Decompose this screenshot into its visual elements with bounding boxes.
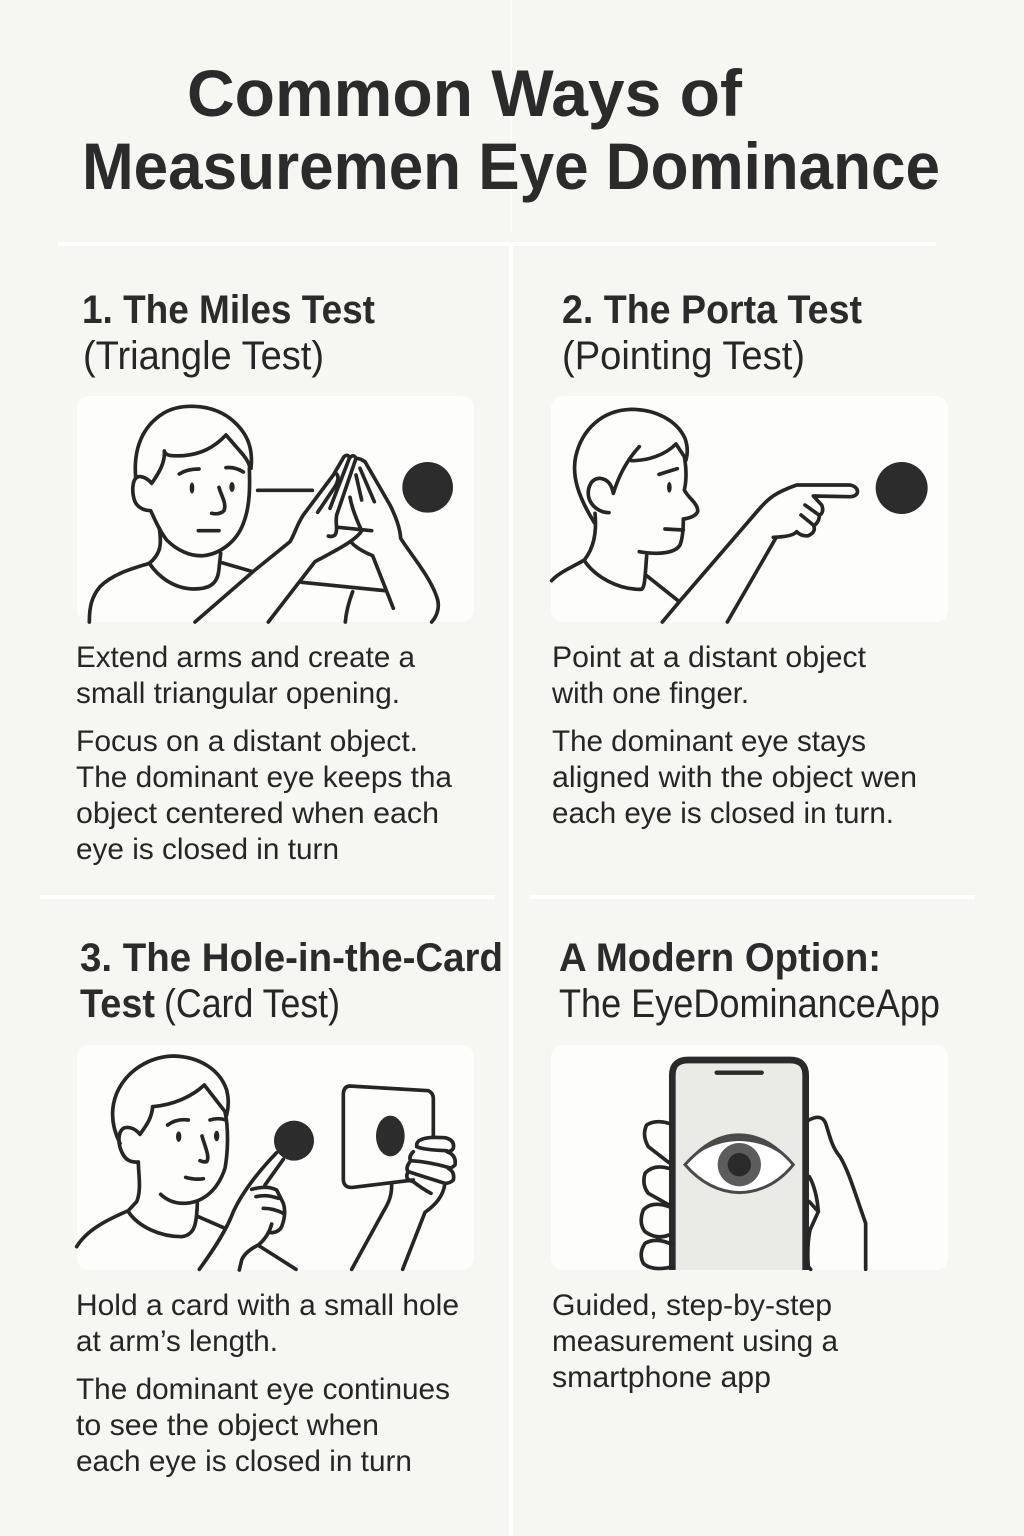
title: Measuremen Eye Dominance bbox=[82, 129, 940, 203]
text block: card test instructions bbox=[76, 1289, 459, 1478]
heading: a modern option bbox=[559, 936, 940, 1026]
panel: the miles test bbox=[76, 288, 474, 866]
heading: the hole-in-the-card test: (Card Test) bbox=[164, 982, 340, 1026]
heading: the miles test bbox=[82, 288, 375, 378]
illustration card: person pointing at a dot bbox=[551, 396, 948, 622]
text block: miles test instructions: small triangular opening. bbox=[76, 677, 400, 710]
heading: the porta test: 2. The Porta Test bbox=[562, 288, 862, 332]
text block: porta test instructions: aligned with the object wen bbox=[552, 761, 917, 794]
illustration card: smartphone with eye held in hand bbox=[551, 1045, 948, 1270]
heading: the porta test: (Pointing Test) bbox=[562, 334, 805, 378]
heading: the hole-in-the-card test: 3. The Hole-in-the-Card bbox=[80, 936, 503, 980]
heading: the hole-in-the-card test: Test bbox=[80, 982, 155, 1026]
text block: card test instructions: Hold a card with a small hole bbox=[76, 1289, 459, 1322]
illustration card: person forming a triangle with hands bbox=[77, 396, 474, 622]
heading: a modern option: A Modern Option: bbox=[559, 936, 881, 980]
text block: app description: Guided, step-by-step bbox=[552, 1289, 832, 1322]
text block: porta test instructions: Point at a distant object bbox=[552, 641, 867, 674]
text block: app description: smartphone app bbox=[552, 1361, 771, 1394]
text block: porta test instructions: The dominant eye stays bbox=[552, 725, 866, 758]
text block: card test instructions: each eye is closed in turn bbox=[76, 1445, 412, 1478]
text block: app description: measurement using a bbox=[552, 1325, 838, 1358]
panel: a modern option bbox=[551, 936, 948, 1394]
heading: the miles test: (Triangle Test) bbox=[83, 334, 324, 378]
text block: miles test instructions: eye is closed in turn bbox=[76, 833, 339, 866]
text block: porta test instructions: with one finger. bbox=[551, 677, 749, 710]
heading: a modern option: The EyeDominanceApp bbox=[559, 982, 940, 1026]
text block: card test instructions: at arm’s length. bbox=[76, 1325, 278, 1358]
text block: porta test instructions: each eye is closed in turn. bbox=[552, 797, 894, 830]
text block: card test instructions: to see the object when bbox=[76, 1409, 379, 1442]
panel: the hole-in-the-card test bbox=[76, 936, 503, 1478]
heading: the hole-in-the-card test bbox=[80, 936, 503, 1026]
heading: the porta test bbox=[562, 288, 862, 378]
illustration card: person with dot and holed card bbox=[77, 1045, 474, 1270]
text block: porta test instructions bbox=[551, 641, 917, 830]
text block: miles test instructions bbox=[76, 641, 452, 866]
title bbox=[82, 56, 940, 203]
text block: app description bbox=[552, 1289, 838, 1394]
text block: miles test instructions: Focus on a distant object. bbox=[76, 725, 418, 758]
text block: miles test instructions: The dominant eye keeps tha bbox=[76, 761, 452, 794]
title: Common Ways of bbox=[187, 56, 743, 130]
heading: the miles test: 1. The Miles Test bbox=[82, 288, 375, 332]
text block: miles test instructions: Extend arms and create a bbox=[76, 641, 415, 674]
text block: card test instructions: The dominant eye continues bbox=[76, 1373, 450, 1406]
panel: the porta test bbox=[551, 288, 948, 830]
text block: miles test instructions: object centered when each bbox=[76, 797, 439, 830]
